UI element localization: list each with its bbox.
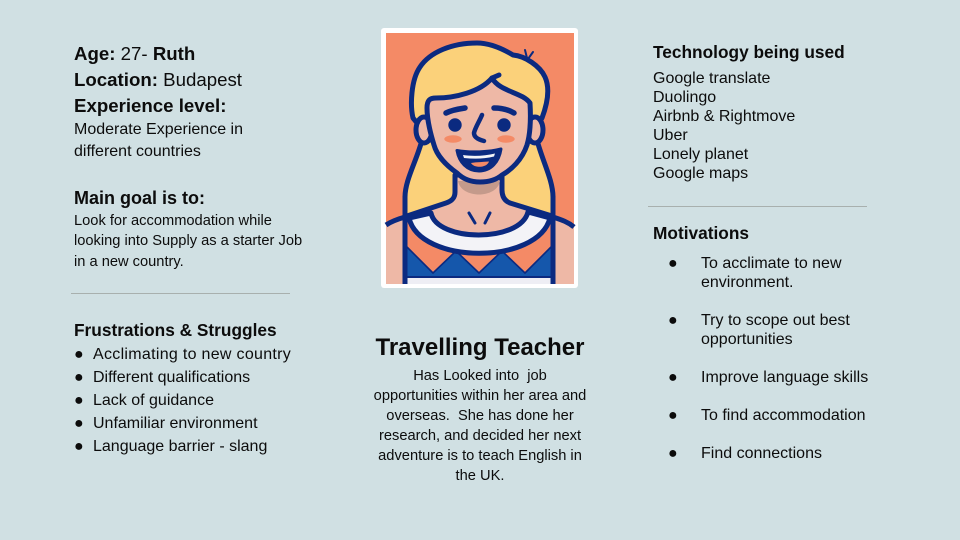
motivations list: To find accommodation <box>701 407 866 424</box>
motivations list <box>668 255 868 462</box>
frustrations list: Lack of guidance <box>93 392 214 408</box>
straps <box>405 196 553 284</box>
frustrations list: ● <box>74 392 84 408</box>
technology list: Lonely planet <box>653 146 748 163</box>
experience level heading: Experience level: <box>74 95 226 116</box>
teeth <box>463 154 495 159</box>
location: Location: Budapest <box>74 69 242 90</box>
motivations list: Find connections <box>701 445 822 462</box>
main goal heading: Main goal is to: <box>74 188 205 208</box>
motivations list: ● <box>668 255 678 272</box>
experience level text: Moderate Experience in <box>74 121 243 138</box>
motivations list: opportunities <box>701 331 793 348</box>
technology heading: Technology being used <box>653 42 845 62</box>
white stripe <box>407 277 552 284</box>
frustrations list: Different qualifications <box>93 368 250 386</box>
experience level text: different countries <box>74 143 201 160</box>
frustrations list: Unfamiliar environment <box>93 414 258 432</box>
description: the UK. <box>456 468 504 484</box>
panel: motivations <box>653 223 868 462</box>
main goal text: in a new country. <box>74 254 184 270</box>
bang tip <box>492 75 499 78</box>
face <box>427 78 530 182</box>
white collar <box>409 212 550 253</box>
age and name: Age: 27- Ruth <box>74 43 195 64</box>
motivations list: To acclimate to new <box>701 255 842 272</box>
lower hair <box>405 140 553 218</box>
mouth <box>457 149 501 171</box>
technology list: Google maps <box>653 165 748 182</box>
description: opportunities within her area and <box>374 388 586 404</box>
hair tuft <box>525 50 533 59</box>
description: research, and decided her next <box>379 428 581 444</box>
title: Travelling Teacher <box>376 334 584 361</box>
description: overseas. She has done her <box>386 408 574 424</box>
portrait: smiling woman with blonde hair <box>381 28 578 288</box>
technology list <box>653 70 795 182</box>
neck and chest <box>407 175 552 236</box>
frustrations list <box>74 346 291 454</box>
description: adventure is to teach English in <box>378 448 582 464</box>
ears <box>416 117 432 143</box>
main goal text: looking into Supply as a starter Job <box>74 233 302 249</box>
frustrations list: ● <box>74 438 84 454</box>
experience level text <box>74 121 243 160</box>
technology list: Airbnb & Rightmove <box>653 108 795 125</box>
panel: frustrations and struggles <box>74 320 291 454</box>
cheeks <box>444 135 462 143</box>
main goal text <box>74 212 302 270</box>
motivations list: environment. <box>701 274 794 291</box>
motivations list: Improve language skills <box>701 369 868 386</box>
description <box>374 368 586 484</box>
panel: profile details <box>74 43 302 270</box>
tongue <box>471 162 489 167</box>
neck shadow <box>458 181 500 194</box>
frustrations heading: Frustrations & Struggles <box>74 320 277 340</box>
eyebrows <box>446 108 514 113</box>
nose <box>474 115 484 141</box>
collarbones <box>469 213 490 223</box>
eyes <box>448 118 462 132</box>
main goal text: Look for accommodation while <box>74 212 272 228</box>
motivations heading: Motivations <box>653 223 749 243</box>
frustrations list: Acclimating to new country <box>93 346 291 362</box>
top: blue body <box>405 245 553 278</box>
top: orange yoke <box>405 216 553 284</box>
motivations list: Try to scope out best <box>701 312 850 329</box>
arms <box>386 217 405 284</box>
motivations list: ● <box>668 312 678 329</box>
portrait card <box>381 28 578 288</box>
frustrations list: ● <box>74 368 84 386</box>
motivations list: ● <box>668 407 678 424</box>
technology list: Uber <box>653 127 688 144</box>
motivations list: ● <box>668 369 678 386</box>
technology list: Google translate <box>653 70 770 87</box>
description: Has Looked into job <box>413 368 547 384</box>
panel: technology being used <box>653 42 845 182</box>
frustrations list: ● <box>74 346 84 362</box>
frustrations list: ● <box>74 414 84 432</box>
motivations list: ● <box>668 445 678 462</box>
technology list: Duolingo <box>653 89 716 106</box>
upper hair <box>411 43 548 135</box>
frustrations list: Language barrier - slang <box>93 438 267 454</box>
